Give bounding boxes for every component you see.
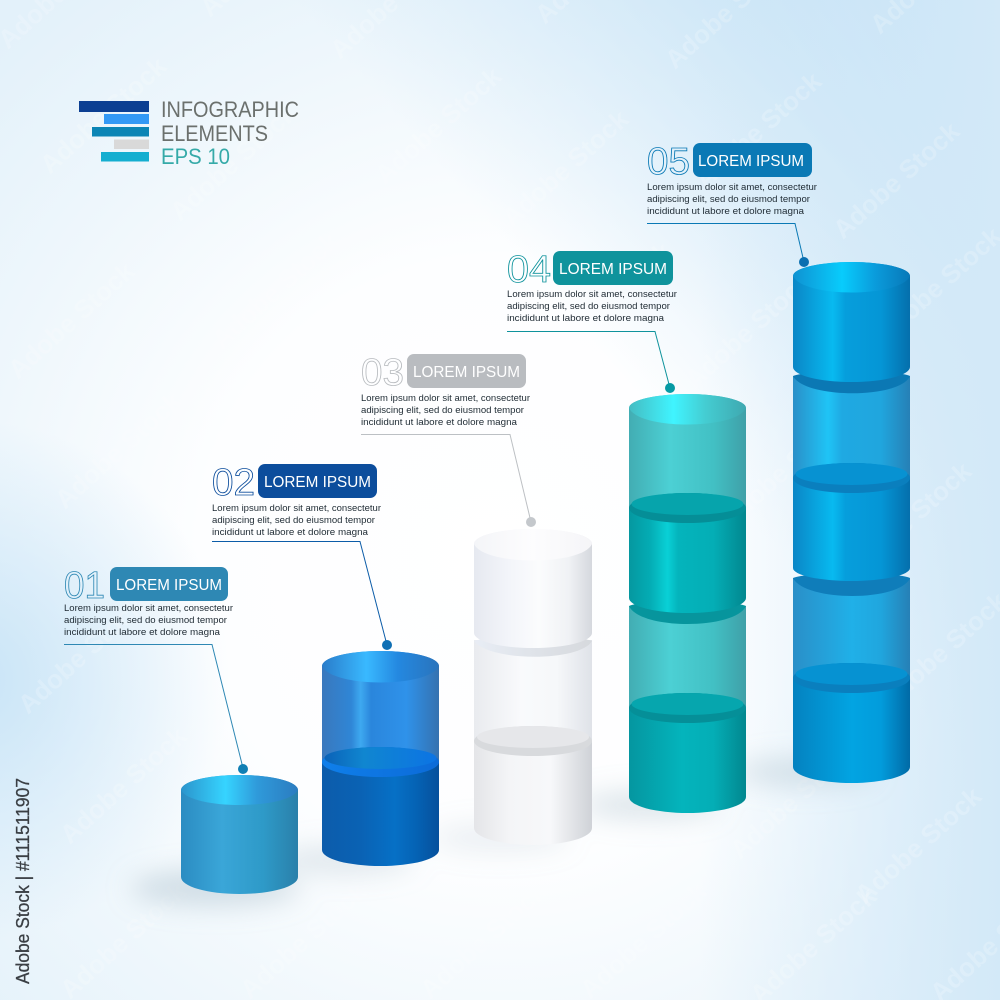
leader line 01 <box>64 644 248 774</box>
watermark pattern: Adobe Stock <box>827 115 966 244</box>
watermark pattern: Adobe Stock <box>219 557 358 686</box>
segment: solid lower <box>322 747 439 866</box>
description 01: incididunt ut labore et dolore magna <box>64 627 221 638</box>
description 02 <box>212 503 382 538</box>
logo text: INFOGRAPHIC <box>161 97 299 122</box>
label pill 02 <box>258 464 377 498</box>
leader line 02 <box>212 542 392 650</box>
watermark pattern: Adobe Stock <box>34 50 173 179</box>
label pill 03: LOREM IPSUM <box>413 364 520 381</box>
segment: top translucent <box>629 394 746 512</box>
watermark pattern: Adobe Stock <box>369 60 508 189</box>
callout 02 <box>212 462 392 650</box>
description 01 <box>64 603 234 638</box>
watermark pattern: Adobe Stock <box>519 770 658 899</box>
watermark pattern: Adobe Stock <box>554 565 693 694</box>
description 01: Lorem ipsum dolor sit amet, consectetur <box>64 603 234 614</box>
label pill 01 <box>110 567 228 601</box>
label pill 05: LOREM IPSUM <box>698 153 804 170</box>
watermark pattern: Adobe Stock <box>206 225 345 354</box>
watermark pattern: Adobe Stock <box>12 590 151 719</box>
cylinder 1 <box>181 775 298 894</box>
description 03 <box>361 393 531 428</box>
number 03: 03 <box>361 352 404 394</box>
cylinder 5 <box>793 262 910 783</box>
stock credit: Adobe Stock | #111511907 <box>13 778 33 984</box>
segment: bottom <box>474 726 592 845</box>
leader line 05 <box>647 224 809 267</box>
label pill 04 <box>553 251 673 285</box>
cylinder 2 <box>322 651 439 866</box>
segment: middle <box>474 636 592 745</box>
number 05: 05 <box>647 141 690 183</box>
label pill 01: LOREM IPSUM <box>116 577 222 594</box>
floor shadows <box>130 758 875 906</box>
logo block <box>79 97 299 169</box>
description 04: Lorem ipsum dolor sit amet, consectetur <box>507 289 678 300</box>
cylinder 3 <box>474 529 592 845</box>
label pill 04: LOREM IPSUM <box>559 261 667 278</box>
watermark pattern: Adobe Stock <box>679 265 818 394</box>
watermark pattern: Adobe Stock <box>2 255 141 384</box>
description 01: adipiscing elit, sed do eiusmod tempor <box>64 615 228 626</box>
watermark pattern: Adobe Stock <box>164 97 303 226</box>
watermark pattern: Adobe Stock <box>179 430 318 559</box>
segment: translucent upper <box>322 651 439 765</box>
segment: third solid <box>793 463 910 581</box>
description 03: Lorem ipsum dolor sit amet, consectetur <box>361 393 531 404</box>
segment: bottom solid <box>793 663 910 783</box>
description 05: incididunt ut labore et dolore magna <box>647 206 805 217</box>
description 05 <box>647 182 818 217</box>
leader line 04 <box>507 332 675 393</box>
watermark pattern: Adobe Stock <box>54 720 193 849</box>
segment: second solid <box>629 493 746 613</box>
label pill 03 <box>407 354 526 388</box>
description 04: adipiscing elit, sed do eiusmod tempor <box>507 301 671 312</box>
number 01: 01 <box>64 565 105 607</box>
watermark pattern: Adobe Stock <box>839 455 978 584</box>
cylinder 4 <box>629 394 746 813</box>
description 03: adipiscing elit, sed do eiusmod tempor <box>361 405 525 416</box>
segment: second translucent <box>793 372 910 482</box>
leader line 03 <box>361 434 536 527</box>
description 05: adipiscing elit, sed do eiusmod tempor <box>647 194 811 205</box>
segment: top <box>793 262 910 382</box>
description 02: Lorem ipsum dolor sit amet, consectetur <box>212 503 382 514</box>
watermark pattern: Adobe Stock <box>714 405 853 534</box>
watermark pattern: Adobe Stock <box>849 780 988 909</box>
watermark pattern: Adobe Stock <box>379 397 518 526</box>
number 02: 02 <box>212 462 255 504</box>
watermark pattern: Adobe Stock <box>496 103 635 232</box>
watermark pattern: Adobe Stock <box>724 735 863 864</box>
callout 05 <box>647 141 818 267</box>
description 02: incididunt ut labore et dolore magna <box>212 527 369 538</box>
label pill 05 <box>693 143 812 177</box>
description 03: incididunt ut labore et dolore magna <box>361 417 518 428</box>
description 04 <box>507 289 678 324</box>
callout 04 <box>507 249 678 393</box>
icon: stacked bars <box>79 101 149 162</box>
number 04: 04 <box>507 249 551 291</box>
logo text: ELEMENTS <box>161 121 268 146</box>
segment: bottom solid <box>629 693 746 813</box>
description 02: adipiscing elit, sed do eiusmod tempor <box>212 515 376 526</box>
description 05: Lorem ipsum dolor sit amet, consectetur <box>647 182 818 193</box>
logo text: EPS 10 <box>161 144 230 169</box>
logo text <box>161 97 299 169</box>
segment: top <box>474 529 592 648</box>
watermark pattern: Adobe Stock <box>539 235 678 364</box>
watermark pattern: Adobe Stock <box>344 267 483 396</box>
callout 01 <box>64 565 248 774</box>
description 04: incididunt ut labore et dolore magna <box>507 313 665 324</box>
segment: third translucent <box>629 602 746 712</box>
watermark pattern: Adobe Stock <box>49 385 188 514</box>
segment: fourth translucent <box>793 574 910 682</box>
watermark pattern: Adobe Stock <box>689 65 828 194</box>
label pill 02: LOREM IPSUM <box>264 474 371 491</box>
callout 03 <box>361 352 536 527</box>
